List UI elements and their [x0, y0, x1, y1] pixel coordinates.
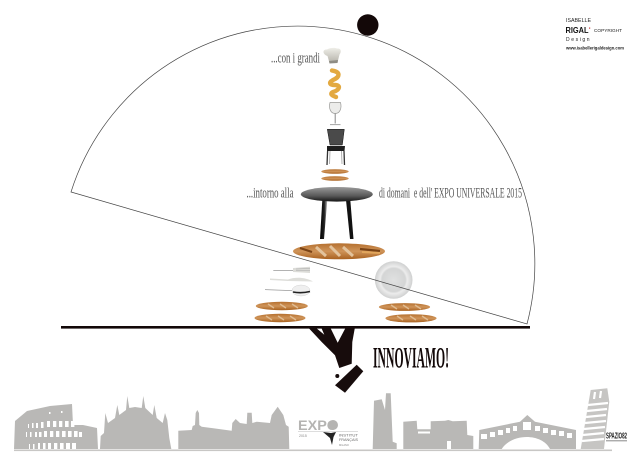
icon: waiter hand — [308, 327, 363, 393]
baguette stack left — [254, 302, 308, 322]
plate — [375, 261, 413, 299]
table — [301, 187, 373, 239]
institut francais logo: FRANÇAIS — [339, 438, 358, 442]
infographic canvas: INNOVIAMO! — [373, 342, 449, 374]
designer credit — [565, 18, 624, 50]
tray line — [61, 326, 530, 329]
tagline: con i grandi: ...con i grandi — [271, 50, 320, 66]
institut francais logo: MILANO — [339, 443, 349, 447]
icon: fusilli pasta — [330, 70, 339, 97]
small baguettes above table — [321, 169, 349, 181]
icon: chef hat — [324, 48, 341, 64]
designer credit: COPYRIGHT — [594, 28, 622, 33]
milan cathedral — [100, 396, 171, 449]
large baguette — [293, 243, 385, 259]
sponsor logo — [606, 432, 627, 441]
skyline ground line — [14, 450, 612, 451]
designer credit: Design — [566, 37, 591, 43]
icon: wine glass — [330, 102, 341, 125]
fork — [273, 267, 310, 273]
expo logo — [298, 418, 358, 438]
institut francais logo: INSTITUT — [339, 434, 359, 438]
rialto bridge — [479, 415, 576, 449]
florence skyline — [178, 407, 289, 449]
designer credit: www.isabellerigaldesign.com — [565, 46, 624, 50]
institut francais logo — [323, 432, 359, 447]
designer credit: ISABELLE — [566, 18, 592, 24]
expo logo: 2015 — [299, 434, 307, 438]
spoon — [265, 285, 310, 296]
cutlery — [265, 267, 313, 296]
designer credit: RIGAL — [566, 26, 589, 35]
tagline: intorno alla: ...intorno alla — [246, 186, 294, 202]
fan-shaped cloche outline — [71, 26, 535, 324]
naples castle — [403, 420, 473, 449]
baguette stack right — [379, 303, 437, 322]
bologna towers — [373, 393, 397, 449]
cuff — [335, 365, 363, 393]
knife — [270, 278, 313, 282]
tower of pisa — [581, 388, 609, 449]
colosseum — [14, 404, 98, 449]
expo logo: EXPO — [298, 418, 338, 433]
tagline: di domani e dell'EXPO: di domani e dell' EXPO UNIVERSALE 2015 — [379, 186, 522, 202]
black knob — [357, 14, 378, 36]
icon: chair — [327, 129, 345, 165]
skyline — [14, 388, 612, 451]
